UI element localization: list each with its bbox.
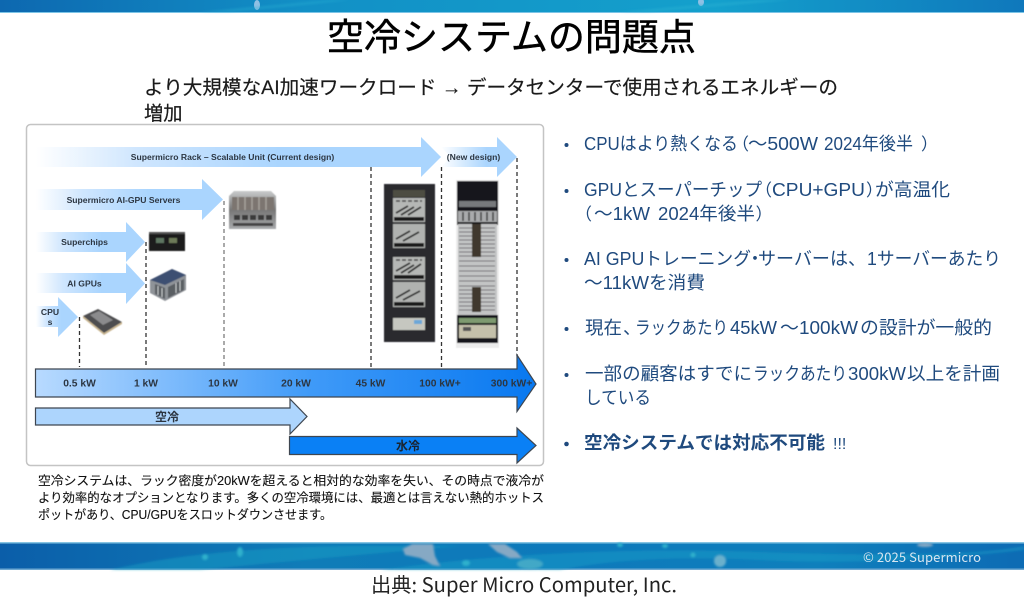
footer band (0, 542, 1024, 570)
icon: CPU chip (83, 309, 122, 335)
bullet: CPU heat: ～500W (748, 134, 818, 154)
bullet: 300kW plans: 一部の顧客はすでに (585, 364, 752, 384)
bullet: CPU heat: 2024年後半 (824, 134, 913, 154)
copyright: © 2025 Supermicro (863, 547, 981, 566)
arrow: rack scalable unit: Supermicro Rack – Scalable Unit (Current design) (131, 152, 334, 162)
arrow: power scale axis: 1 kW (134, 378, 158, 390)
bullet: training servers (564, 249, 1001, 293)
arrow: CPUs: s (48, 317, 53, 327)
bullet: GPU and superchips: 2024年後半 (658, 204, 755, 224)
panel: power density chart (26, 124, 544, 466)
bullet: conclusion: !!! (833, 436, 846, 453)
arrow: power scale axis: 100 kW+ (419, 378, 461, 390)
subheading: より大規模なAI加速ワークロード → データセンターで使用されるエネルギーの (144, 77, 838, 99)
bullet: training servers: ～11kWを消費 (584, 273, 705, 293)
bullet: GPU and superchips (564, 180, 950, 224)
bullet: current racks: ラックあたり (635, 318, 728, 338)
bullet: 300kW plans: している (585, 388, 651, 408)
arrow: new design: (New design) (447, 152, 500, 162)
bullet: GPU and superchips: ） (756, 205, 772, 224)
arrow: CPUs: CPU (41, 307, 59, 317)
arrow: power scale axis: 0.5 kW (63, 378, 96, 390)
arrow: liquid cooling: 水冷 (396, 438, 420, 453)
top decorative band (0, 0, 1024, 13)
bullet: 300kW plans: 300kW (848, 364, 906, 384)
arrow: rack scalable unit (36, 137, 441, 177)
arrow: superchips: Superchips (61, 237, 108, 247)
bullet: GPU and superchips: ） (866, 181, 883, 200)
bullet: GPU and superchips: が高温化 (875, 180, 950, 200)
arrow: power scale axis: 45 kW (356, 378, 386, 390)
chart caption: 空冷システムは、ラック密度が20kWを超えると相対的な効率を失い、その時点で液冷が (38, 473, 544, 488)
bullet: training servers: 、 (848, 249, 866, 269)
bullet: current racks: 現在 (585, 318, 622, 338)
bullet: GPU and superchips: （ (575, 205, 592, 224)
subheading: 増加 (144, 103, 183, 125)
bullet: GPU and superchips: （ (755, 181, 772, 200)
arrow: power scale axis (36, 355, 536, 412)
chart caption (38, 473, 544, 522)
bullet: current racks (564, 318, 992, 338)
icon: superchip board (149, 232, 185, 251)
arrow: power scale axis: 300 kW+ (491, 378, 532, 390)
bullet: current racks: 45kW (730, 318, 777, 338)
bullet: 300kW plans: 以上を計画 (907, 364, 1000, 384)
chart caption: ポットがあり、CPU/GPUをスロットダウンさせます。 (38, 507, 332, 522)
arrow: power scale axis: 20 kW (281, 378, 311, 390)
arrow: air cooling (36, 399, 307, 434)
chart caption: より効率的なオプションとなります。多くの空冷環境には、最適とは言えない熱的ホットス (38, 490, 544, 505)
arrow: AI GPUs: AI GPUs (67, 278, 102, 288)
arrow: AI GPUs (36, 263, 145, 304)
bullet: GPU and superchips: GPUとスーパーチップ (584, 180, 762, 200)
bullet: 300kW plans: ラックあたり (753, 364, 847, 384)
bullet: training servers: AI GPUトレーニング (584, 249, 751, 269)
arrow: air cooling: 空冷 (155, 409, 179, 424)
arrow: new design (441, 137, 517, 177)
bullet: conclusion: 空冷システムでは対応不可能 (584, 433, 825, 453)
bullet: 300kW plans (564, 364, 1000, 408)
arrow: liquid cooling (290, 428, 536, 463)
arrow: AI-GPU servers (36, 179, 223, 220)
bullet: CPU heat: ） (921, 135, 938, 154)
bullet: current racks: 、 (623, 318, 641, 338)
icon: new design rack (456, 180, 499, 348)
bullet: training servers: 1サーバーあたり (867, 249, 1001, 269)
bullet: CPU heat: CPUはより熱くなる (584, 134, 738, 154)
bullet: training servers: ・ (746, 249, 764, 269)
dashed guide lines (80, 158, 517, 367)
bullet: current racks: の設計が一般的 (860, 318, 992, 338)
arrow: superchips (36, 222, 145, 262)
bullet: GPU and superchips: CPU+GPU (772, 180, 865, 200)
icon: AI GPU heatsink (150, 269, 186, 301)
subheading (144, 77, 838, 125)
bullet: training servers: サーバーは (758, 249, 848, 269)
arrow: AI-GPU servers: Supermicro AI-GPU Servers (67, 195, 181, 205)
title: 空冷システムの問題点 (327, 17, 696, 58)
icon: GPU server (229, 191, 276, 229)
bullet: CPU heat: （ (732, 135, 749, 154)
arrow: power scale axis: 10 kW (208, 378, 238, 390)
bullet: current racks: ～100kW (780, 318, 858, 338)
bullet list (564, 134, 1001, 453)
icon: current design rack (384, 184, 435, 342)
bullet: GPU and superchips: ～1kW (594, 204, 650, 224)
arrow: CPUs (36, 297, 78, 337)
bullet: CPU heat (564, 134, 938, 154)
